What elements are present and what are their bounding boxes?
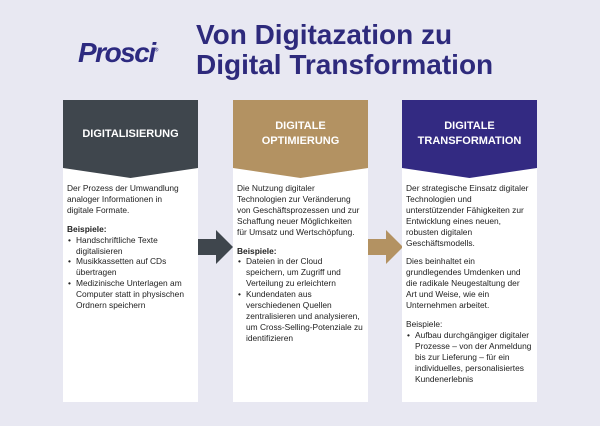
text: digitalisierung: Musikkassetten auf CDs <box>76 256 166 266</box>
panel: digitalisierung <box>63 100 198 402</box>
text: transformation: Der strategische Einsatz digitaler <box>406 183 528 193</box>
text: optimierung: um Cross-Selling-Potenziale zu <box>246 322 363 332</box>
text: transformation: individuelles, personalisiertes <box>415 363 524 373</box>
arrow: dark <box>198 230 233 264</box>
text: transformation: Entwicklung eines neuen, <box>406 216 501 226</box>
panel: digitale optimierung: DIGITALE <box>275 120 326 132</box>
text: optimierung: Verteilung zu erleichtern <box>246 278 336 288</box>
text: optimierung: Kundendaten aus <box>246 289 312 299</box>
text: transformation: Geschäftsmodells. <box>406 238 475 248</box>
text: transformation: unterstützender Fähigkeiten zur <box>406 205 524 215</box>
text: optimierung: Beispiele: <box>237 246 277 256</box>
text: transformation: Unternehmen arbeitet. <box>406 300 489 310</box>
header: digitalisierung <box>63 100 198 178</box>
panel: digitale optimierung <box>233 100 368 402</box>
text: optimierung: speichern, um Zugriff und <box>246 267 341 277</box>
panel: digitale transformation: TRANSFORMATION <box>418 135 521 147</box>
text: transformation: grundlegendes Umdenken und <box>406 267 521 277</box>
text: optimierung: Schaffung neuer Möglichkeiten <box>237 216 352 226</box>
text: digitalisierung <box>67 183 184 310</box>
text: digitalisierung: digitale Formate. <box>67 205 129 215</box>
text: transformation <box>406 183 531 384</box>
header: transformation <box>402 100 537 178</box>
text: optimierung: Technologien zur Veränderung <box>237 194 351 204</box>
text: optimierung <box>237 183 363 343</box>
panel: digitale transformation: DIGITALE <box>444 120 495 132</box>
text: optimierung: zentralisieren und analysieren, <box>246 311 360 321</box>
text: transformation: Aufbau durchgängiger digitaler <box>415 330 529 340</box>
text: digitalisierung: Beispiele: <box>67 224 107 234</box>
text: digitalisierung: Ordnern speichern <box>76 300 145 310</box>
text: transformation: bis zur Lieferung – für ein <box>415 352 510 362</box>
text: transformation: die radikale Neugestaltung der <box>406 278 520 288</box>
text: optimierung: für Umsatz und Wertschöpfung. <box>237 227 355 237</box>
text: transformation: robusten digitalen <box>406 227 472 237</box>
panel: digitalisierung: DIGITALISIERUNG <box>82 128 179 140</box>
text: transformation: Beispiele: <box>406 319 442 329</box>
text: digitalisierung: Medizinische Unterlagen am <box>76 278 182 288</box>
text: digitalisierung: analoger Informationen in <box>67 194 162 204</box>
panel: digitale transformation <box>402 100 537 402</box>
text: transformation: Kundenerlebnis <box>415 374 473 384</box>
text: optimierung: von Geschäftsprozessen und zur <box>237 205 359 215</box>
arrow: gold <box>368 230 402 264</box>
text: digitalisierung: Handschriftliche Texte <box>76 235 158 245</box>
text: digitalisierung: Der Prozess der Umwandlung <box>67 183 179 193</box>
text: digitalisierung: übertragen <box>76 267 117 277</box>
text: optimierung: Dateien in der Cloud <box>246 256 322 266</box>
text: transformation: Dies beinhaltet ein <box>406 256 475 266</box>
text: optimierung: Die Nutzung digitaler <box>237 183 315 193</box>
text: transformation: Technologien und <box>406 194 472 204</box>
text: optimierung: identifizieren <box>246 333 293 343</box>
panel: digitale optimierung: OPTIMIERUNG <box>262 135 339 147</box>
text: digitalisierung: Computer statt in physischen <box>76 289 184 299</box>
title <box>196 19 493 80</box>
title: Digital Transformation <box>196 49 493 80</box>
logo: Prosci® <box>78 37 157 68</box>
title: Von Digitazation zu <box>196 19 452 50</box>
text: transformation: Prozesse – von der Anmeldung <box>415 341 531 351</box>
header: optimierung <box>233 100 368 178</box>
text: optimierung: verschiedenen Quellen <box>246 300 332 310</box>
text: transformation: Art und Weise, wie ein <box>406 289 489 299</box>
text: digitalisierung: digitalisieren <box>76 246 123 256</box>
